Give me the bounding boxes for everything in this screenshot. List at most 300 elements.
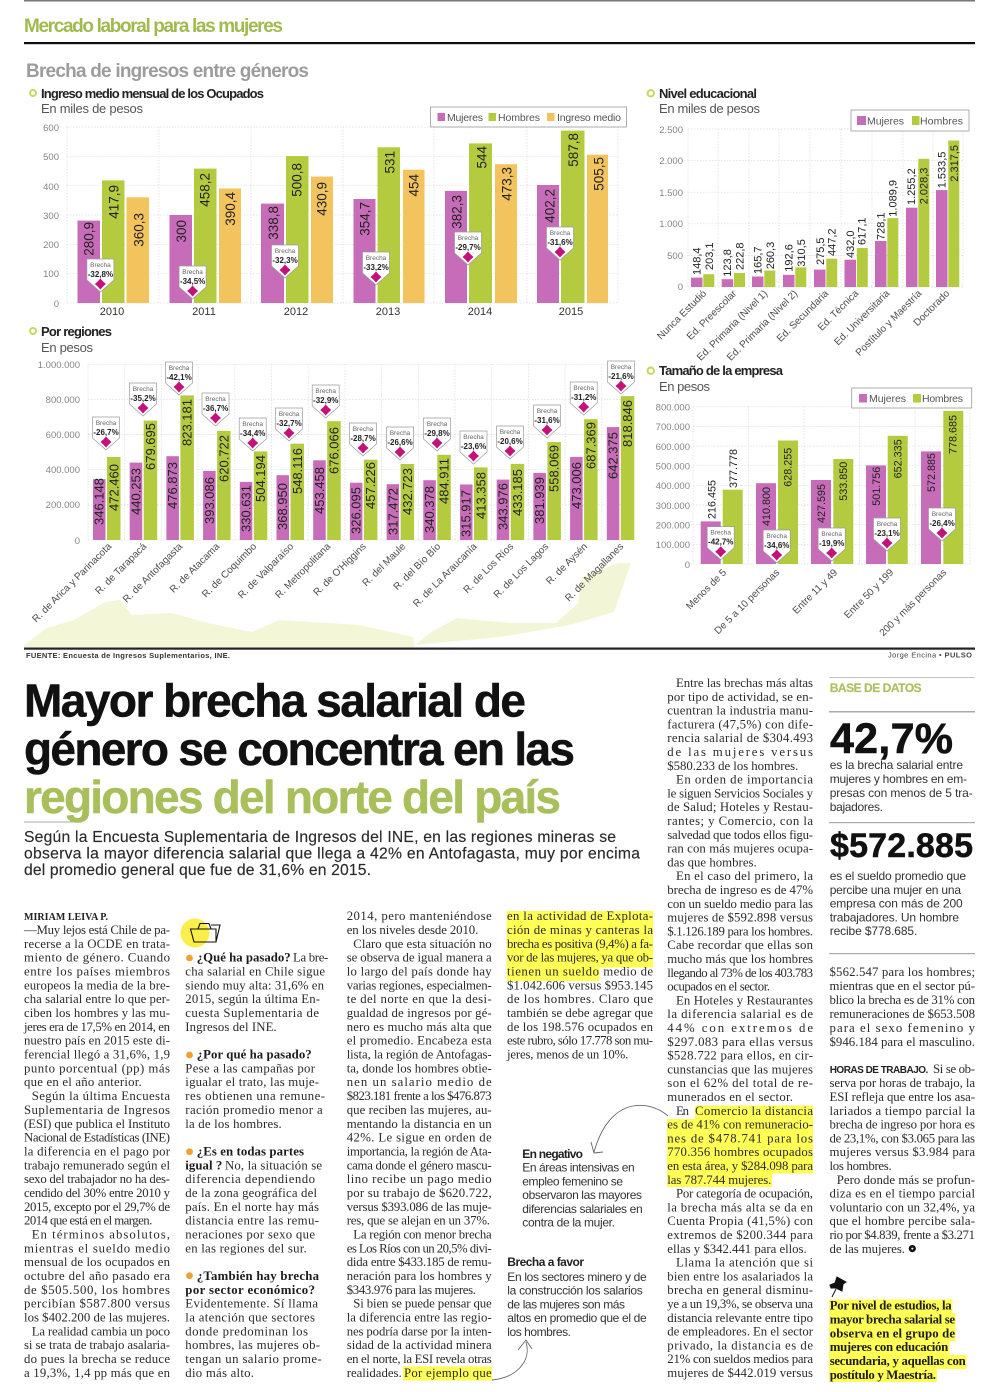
category labels: De 5 a 10 personas	[713, 567, 782, 637]
gap tags: Brecha	[573, 385, 594, 392]
gap tags: -29,7%	[455, 243, 481, 252]
text column 1: de $505.500, los hombres	[24, 1283, 170, 1297]
text column 5: por tipo de actividad, se en-	[667, 690, 813, 704]
value labels: 317.472	[385, 488, 400, 535]
value labels: 275,5	[815, 237, 827, 265]
text column 1: los $402.200 de las mujeres.	[24, 1310, 170, 1324]
value labels: 410.800	[761, 487, 773, 526]
gap tags: -28,7%	[350, 434, 376, 443]
text column 5: mujeres de $592.898 versus	[667, 911, 813, 925]
gap tags: Brecha	[932, 511, 953, 518]
bars: 2013	[354, 147, 424, 318]
text column 6: para el sexo femenino y	[830, 1021, 976, 1035]
value labels: 728,1	[876, 212, 888, 240]
text column 3: lino recibe un pago medio	[347, 1172, 492, 1186]
chart grid and axis: 800.000	[46, 395, 80, 406]
panel: nivel educacional	[648, 86, 969, 363]
question: sector economico: tengan un salario prome-	[185, 1352, 322, 1366]
value labels	[692, 145, 961, 277]
text column 5: Por categoría de ocupación,	[676, 1187, 813, 1201]
gap tags: -42,7%	[708, 538, 733, 547]
text column 3: por su trabajo de $620.722,	[347, 1186, 492, 1200]
category labels	[30, 541, 626, 625]
category labels: 200 y más personas	[878, 567, 949, 639]
value labels: 457.226	[363, 462, 378, 509]
category labels: Ed. Primaria (Nivel 1)	[695, 288, 770, 363]
arrow: to en negativo	[591, 1105, 668, 1153]
chart grid and axis: 500.000	[656, 462, 690, 472]
text column 3: se observa de igual manera a	[347, 951, 492, 965]
heading: por regiones	[30, 324, 112, 355]
stat: 42,7%: mujeres y hombres en em-	[830, 772, 967, 786]
value labels: 620.722	[216, 435, 231, 482]
bars: 2013: 454	[406, 174, 422, 197]
value labels: 330.631	[238, 485, 254, 532]
value labels: 548.116	[290, 448, 305, 494]
text column 5: cunstancias que las mujeres	[667, 1062, 813, 1076]
text column 3	[347, 909, 492, 1380]
chart grid and axis: 1.500	[659, 188, 683, 199]
text column 3: que reciben las mujeres, au-	[347, 1103, 492, 1117]
text column 3: mentando la distancia en un	[347, 1117, 492, 1131]
text column 5: la brecha más alta se da en	[667, 1200, 814, 1214]
gap tags: -26,7%	[93, 428, 119, 437]
text column 1: mensual de los ocupados en	[24, 1255, 171, 1269]
question: sector economico: donde predominan los	[185, 1324, 308, 1338]
gap tags: -23,1%	[874, 529, 900, 538]
question: sector economico	[185, 1269, 322, 1380]
text column 4: este rubro, sólo 17.778 son mu-	[507, 1034, 653, 1048]
text column 3: $343.976 para las mujeres.	[347, 1283, 476, 1297]
text column 6: Si se ob-	[933, 1062, 975, 1076]
category labels: Entre 50 y 199	[842, 567, 896, 621]
question: es en todas partes igual: ¿Es en todas partes	[197, 1144, 304, 1158]
highlight: por ejemplo que	[403, 1366, 492, 1380]
gap tags: Brecha	[390, 430, 411, 437]
value labels: 533.850	[838, 462, 850, 501]
text column 6: mujeres versus $3.984 para	[830, 1145, 975, 1159]
category labels	[655, 288, 952, 363]
text column 5: son el 62% del total de re-	[667, 1076, 813, 1090]
background mountain silhouette	[24, 563, 631, 647]
text column 4: tienen un sueldo	[507, 964, 599, 978]
chart grid and axis: 200	[43, 240, 59, 251]
text column 3: 42%. Le sigue en orden de	[347, 1131, 492, 1145]
gap tags: Brecha	[766, 533, 787, 540]
chart grid and axis	[38, 360, 631, 547]
gap tags: -29,8%	[424, 429, 450, 438]
gap tags: -42,1%	[166, 373, 192, 382]
gap tags: Brecha	[169, 365, 190, 372]
callout: highlighted note: postítulo y Maestría.	[830, 1368, 936, 1382]
bars: 2011: 2011	[192, 306, 216, 318]
text column 5: Cuenta Propia (41,5%) con	[667, 1214, 814, 1228]
value labels: 377.778	[728, 449, 740, 488]
text column 5: nes de $478.741 para los	[667, 1131, 813, 1145]
text column 4: ción de minas y canteras la	[507, 923, 653, 937]
gap tags: Brecha	[96, 420, 117, 427]
value labels: 1.255,2	[906, 168, 918, 205]
text column 6: diza es en el tiempo parcial	[830, 1187, 975, 1201]
chart grid and axis: 2.000	[659, 156, 683, 167]
text column 5: ellas y $342.441 para ellos.	[667, 1242, 807, 1256]
bars: 2010: 280,9	[82, 222, 96, 256]
callout: highlighted note: mayor brecha salarial se	[830, 1312, 955, 1326]
callout: en negativo	[522, 1147, 643, 1230]
value labels: 687.369	[583, 422, 598, 469]
value labels: 123,8	[722, 249, 734, 277]
text column 3: importancia, la región de Ata-	[347, 1144, 492, 1158]
text column 5: mujeres de $442.019 versus	[667, 1366, 813, 1380]
text column 3: versus $393.086 de las muje-	[347, 1200, 492, 1214]
gap tags: -20,6%	[497, 437, 523, 446]
text column 3: en el norte, la ESI revela otras	[347, 1352, 492, 1366]
text column 5: En	[676, 1104, 690, 1118]
legend: Hombres	[920, 116, 963, 128]
text column 1: entre los países miembros	[24, 964, 170, 978]
value labels	[92, 399, 635, 537]
text column 4: jeres, menos de un 10%.	[506, 1048, 628, 1062]
value labels: 1.089,9	[887, 180, 899, 217]
gap tags: Brecha	[821, 531, 842, 538]
gap tags: -34,6%	[764, 541, 789, 550]
chart grid and axis	[656, 402, 970, 571]
chart grid and axis: 0	[678, 282, 683, 293]
value labels: 393.086	[202, 477, 217, 524]
chart grid and axis: 0	[685, 560, 690, 571]
bars: 2010: 2010	[100, 306, 124, 318]
stat: 42,7%: es la brecha salarial entre	[830, 758, 963, 772]
category labels: R. de Coquimbo	[200, 541, 259, 600]
chart grid and axis: 600.000	[46, 430, 80, 441]
gap tags: Brecha	[710, 530, 731, 537]
short rule under headline	[24, 822, 73, 823]
chart grid and axis: 300.000	[656, 501, 690, 512]
text column 1: recerse a la OCDE en trata-	[24, 937, 170, 951]
text column 5: le siguen Servicios Sociales y	[667, 786, 814, 800]
text column 4: medio de	[603, 964, 653, 978]
question: que ha pasado: cuesta Suplementaria de	[185, 1006, 319, 1020]
value labels: 818.846	[620, 400, 635, 447]
question: es en todas partes igual	[185, 1144, 322, 1255]
legend	[852, 388, 972, 408]
value labels: 617,1	[857, 217, 869, 245]
bars: 2012	[261, 156, 333, 318]
bars: 2012: 2012	[284, 306, 308, 318]
heading: tamaño de la empresa: Tamaño de la empresa	[659, 363, 784, 378]
text column 5: 44% con extremos de	[667, 1021, 813, 1035]
category labels: R. de Magallanes	[563, 541, 626, 604]
question: por que ha pasado: Pese a las campañas por	[185, 1061, 316, 1075]
heading: ingreso medio: En miles de pesos	[41, 101, 144, 116]
gap tags: Brecha	[133, 386, 154, 393]
gap tags: -32,7%	[276, 419, 302, 428]
value labels: 2.028,3	[918, 168, 930, 204]
chart grid and axis: 600	[43, 123, 59, 134]
text column 5: extremos de $200.344 para	[667, 1228, 813, 1242]
stat: 42,7%: presas con menos de 5 tra-	[830, 786, 973, 800]
text column 5: las 787.744 mujeres.	[667, 1173, 771, 1187]
gap tags: Brecha	[205, 396, 226, 403]
value labels: 473.006	[569, 462, 584, 509]
chart grid and axis: 0	[75, 536, 80, 547]
category labels: R. de Atacama	[168, 541, 222, 596]
stat: 42,7%: 42,7%	[830, 715, 953, 763]
bars: 2014	[445, 143, 517, 318]
bars: 2012: 338,8	[266, 206, 281, 240]
question: que ha pasado: cha salarial en Chile sigue	[185, 964, 325, 978]
value labels: 447,2	[827, 228, 839, 256]
text column 1: jeres era de 17,5% en 2014, en	[23, 1020, 171, 1034]
heading: tamaño de la empresa: En pesos	[659, 379, 710, 394]
text column 3: es Los Ríos con un 20,5% divi-	[347, 1241, 492, 1255]
category labels: R. del Maule	[361, 541, 408, 589]
text column 1: La realidad cambia un poco	[32, 1324, 170, 1338]
text column 1: nuestro país en 2015 este di-	[24, 1034, 170, 1048]
question: que ha pasado: siendo muy alta: 31,6% en	[185, 978, 325, 992]
text column 5: En Hoteles y Restaurantes	[676, 993, 813, 1007]
text column 3: neración para los hombres y	[347, 1269, 492, 1283]
graphic title: Brecha de ingresos entre géneros	[26, 61, 309, 82]
value labels: 433.185	[510, 469, 525, 516]
gap tags: -19,9%	[819, 539, 844, 548]
text column 3: La región con menor brecha	[353, 1228, 492, 1242]
value labels: 476.873	[165, 462, 180, 509]
text column 5: salvedad que todos ellos figu-	[667, 828, 813, 842]
text column 1: a 19,3%, 1,4 pp más que en	[24, 1366, 171, 1380]
sidebar: base de datos	[829, 677, 975, 954]
category labels: R. de La Araucanía	[411, 541, 480, 610]
text column 5: de las mujeres versus	[667, 745, 813, 759]
category labels: R. de Tarapacá	[94, 541, 149, 597]
gap tags: Brecha	[458, 235, 479, 242]
category labels: Ed. Primaria (Nivel 2)	[725, 288, 800, 363]
question: es en todas partes igual: de la zona geográfica del	[185, 1186, 317, 1200]
bars: 2011	[170, 169, 241, 318]
callout: brecha a favor: altos en promedio que el de	[507, 1311, 647, 1325]
value labels: 558.069	[547, 445, 562, 492]
callout: brecha a favor: Brecha a favor	[507, 1255, 584, 1269]
gap tags: Brecha	[427, 421, 448, 428]
gap tags: Brecha	[537, 408, 558, 415]
gap tags: Brecha	[90, 262, 111, 269]
text column 1: que en el año anterior.	[24, 1075, 142, 1089]
category labels: Ed. Universitaria	[832, 288, 892, 348]
chart grid and axis: 400.000	[656, 481, 690, 492]
source line and credit: FUENTE: Encuesta de Ingresos Suplementarios, INE.	[26, 651, 230, 660]
question: por que ha pasado: la de los hombres.	[185, 1117, 282, 1131]
text column 1: —Muy lejos está Chile de pa-	[23, 923, 170, 937]
question: es en todas partes igual: país. En el norte hay más	[185, 1200, 319, 1214]
gap tags: Brecha	[463, 434, 484, 441]
text column 5: $.1.126.189 para los hombres.	[667, 924, 813, 938]
text column 5: En orden de importancia	[676, 773, 813, 787]
callout: brecha a favor: de las mujeres son más	[507, 1297, 625, 1311]
gap tags: Brecha	[182, 269, 203, 276]
gap tags: -35,2%	[130, 394, 156, 403]
stat: $572.885: es el sueldo promedio que	[830, 869, 966, 883]
callout: en negativo: contra de la mujer.	[522, 1216, 615, 1230]
category labels: R. de Arica y Parinacota	[30, 541, 114, 625]
bars: 2015	[537, 131, 608, 318]
heading: ingreso medio: Ingreso medio mensual de los Ocupados	[41, 86, 264, 101]
question: que ha pasado: ¿Qué ha pasado?	[197, 951, 291, 965]
question: es en todas partes igual: en las regiones del sur.	[185, 1241, 307, 1255]
category labels: Ed. Secundaria	[775, 288, 831, 344]
value labels: 676.066	[326, 427, 342, 474]
value labels	[706, 415, 960, 526]
text column 3: gualdad de ingresos por gé-	[347, 1006, 492, 1020]
question: por que ha pasado: ¿Por qué ha pasado?	[197, 1048, 312, 1062]
text column 4: vor de las mujeres, ya que ob-	[507, 951, 653, 965]
text column 1: MIRIAM LEIVA P.	[24, 912, 108, 923]
text column 6: de las mujeres.	[830, 1242, 905, 1256]
text column 6: los hombres.	[830, 1159, 892, 1173]
value labels: 453.458	[312, 467, 327, 514]
text column 3: sidad de la actividad minera	[347, 1338, 492, 1352]
question: es en todas partes igual: distancia entre las remu-	[185, 1214, 319, 1228]
callout: highlighted note: mujeres con educación	[830, 1340, 948, 1354]
text column 5	[667, 676, 814, 1380]
text column 1: Nacional de Estadísticas (INE)	[24, 1131, 170, 1145]
chart grid and axis	[659, 125, 963, 293]
heading: nivel educacional	[648, 86, 760, 116]
chart grid and axis: 300	[43, 211, 59, 222]
panel: ingreso medio mensual	[30, 86, 626, 318]
value labels: 440.253	[128, 468, 143, 515]
category labels: Postítulo y Maestría	[854, 288, 924, 359]
bars: 2014: 2014	[468, 306, 492, 318]
value labels: 778.685	[948, 415, 960, 454]
value labels: 203,1	[704, 242, 716, 270]
text column 5: Entre las brechas más altas	[676, 676, 813, 690]
bars: 2010	[78, 180, 149, 318]
bars: 2012: 500,8	[290, 163, 304, 197]
chart grid and axis: 800.000	[656, 402, 690, 414]
text column 3: la diferencia entre las regio-	[347, 1310, 492, 1324]
text column 4: en la actividad de Explota-	[507, 909, 653, 923]
value labels: 427.595	[816, 484, 828, 523]
text column 1	[23, 912, 171, 1380]
text column 5: mucho más que los hombres	[667, 952, 813, 966]
callout: brecha a favor: los hombres.	[507, 1325, 571, 1339]
text column 6: remuneraciones de $653.508	[830, 1007, 975, 1021]
text column 5: Llama la atención que si	[676, 1256, 813, 1270]
text column 5: Comercio la distancia	[695, 1104, 813, 1118]
question: por que ha pasado: ración promedio menor a	[185, 1103, 323, 1117]
question: que ha pasado: 2015, según la última En-	[185, 992, 320, 1006]
gap tags: -23,6%	[461, 442, 486, 451]
gap tags: Brecha	[550, 230, 571, 237]
value labels: 148,4	[692, 247, 704, 275]
headline: género se concentra en las	[24, 723, 575, 775]
text column 1: percibían $587.800 versus	[24, 1297, 170, 1311]
bars	[93, 395, 634, 540]
legend: Hombres	[922, 393, 963, 405]
panel: por regiones	[30, 324, 635, 625]
text column 6: voluntario con un 32,4%, ya	[830, 1200, 975, 1214]
gap tags: -32,9%	[313, 396, 338, 405]
stat: 42,7%: bajadores.	[830, 800, 883, 814]
bars: 2010: 360,3	[132, 213, 146, 247]
chart grid and axis: 100	[43, 269, 59, 280]
icon: folder	[180, 918, 220, 948]
text column 1: 2014 que está en el margen.	[24, 1214, 152, 1228]
chart grid and axis: 200.000	[46, 500, 80, 511]
bars: 2010: 417,9	[106, 185, 122, 219]
text column 6: $946.184 para el masculino.	[830, 1035, 975, 1049]
text column 5: de Salud; Hoteles y Restau-	[667, 800, 813, 814]
text column 5: en esta área, y $284.098 para	[667, 1159, 813, 1173]
gap tags: Brecha	[315, 388, 336, 395]
callout: highlighted note	[829, 1298, 966, 1382]
stat: $572.885	[830, 827, 973, 938]
value labels: 346.148	[92, 478, 107, 525]
text column 3: cama donde el género mascu-	[347, 1158, 492, 1172]
bars	[691, 140, 959, 287]
question: sector economico: ¿También hay brecha	[197, 1269, 320, 1283]
text column 1: 2015, excepto por el 29,7% de	[24, 1200, 170, 1214]
chart grid and axis: 2.500	[659, 125, 683, 136]
category labels: R. de O'Higgins	[312, 541, 369, 598]
bars: 2014: 473,3	[500, 167, 514, 201]
highlight: explotacion de minas	[507, 911, 653, 981]
chart grid and axis: 200.000	[656, 520, 690, 532]
text column 1: En términos absolutos,	[32, 1228, 170, 1242]
callout: brecha a favor	[507, 1255, 647, 1339]
text column 5: $528.722 para ellos, en cir-	[667, 1049, 813, 1063]
category labels: Ed. Técnica	[816, 288, 861, 333]
category labels: R. de Los Lagos	[492, 541, 551, 601]
text column 1: trabajo remunerado según el	[24, 1158, 170, 1172]
text column 6	[830, 965, 976, 1256]
gap tags	[87, 227, 574, 299]
value labels: 165,7	[753, 246, 765, 274]
gap tags: Brecha	[275, 248, 296, 255]
chart grid and axis: 1.000.000	[38, 360, 80, 371]
category labels	[684, 567, 949, 639]
value labels: 326.095	[349, 487, 364, 534]
text column 5: bien entre los asalariados la	[667, 1269, 813, 1283]
value labels: 2.317,5	[949, 145, 961, 182]
chart grid and axis: 0	[54, 299, 59, 310]
source line and credit	[24, 648, 975, 660]
heading: tamaño de la empresa	[648, 363, 784, 394]
value labels: 652.335	[892, 439, 904, 478]
text column 4: brecha es positiva (9,4%) a fa-	[507, 937, 653, 951]
chart grid and axis: 600.000	[656, 442, 690, 453]
callout: highlighted note: observa en el grupo de	[830, 1326, 955, 1340]
chart grid and axis: 400	[43, 182, 59, 193]
text column 1: mientras el sueldo medio	[24, 1241, 170, 1255]
value labels: 432.723	[400, 468, 415, 515]
stat: $572.885: empresa con más de 200	[830, 897, 963, 911]
text column 1: europeos la media de la bre-	[24, 978, 170, 992]
gap tags: -26,4%	[929, 519, 955, 528]
text column 5: das que hombres.	[667, 855, 757, 869]
chart grid and axis: 500	[43, 152, 59, 163]
gap tags: -31,2%	[571, 393, 596, 402]
callout: highlighted note: secundaria, y aquellas con	[830, 1354, 966, 1368]
highlight: comercio	[667, 1106, 813, 1187]
text column 3: nen un salario medio de	[347, 1075, 492, 1089]
question: por que ha pasado	[185, 1048, 325, 1131]
chart grid and axis	[43, 123, 618, 310]
value labels: 572.885	[926, 453, 938, 492]
text column 1: ferencial llegó a 31,6%, 1,9	[24, 1048, 170, 1062]
text column 6: de 23,1%, con $3.065 para las	[830, 1131, 975, 1145]
question: que ha pasado: Ingresos del INE.	[185, 1020, 277, 1034]
